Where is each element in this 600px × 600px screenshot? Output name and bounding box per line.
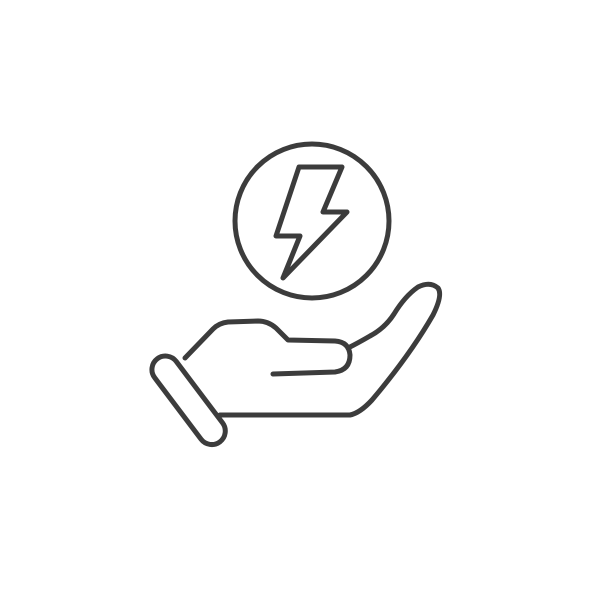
palm and fingers (185, 321, 350, 374)
cuff (147, 351, 231, 450)
icon: circle with lightning bolt (235, 144, 389, 298)
icon: hand (147, 284, 440, 450)
icon: lightning bolt (276, 167, 347, 278)
